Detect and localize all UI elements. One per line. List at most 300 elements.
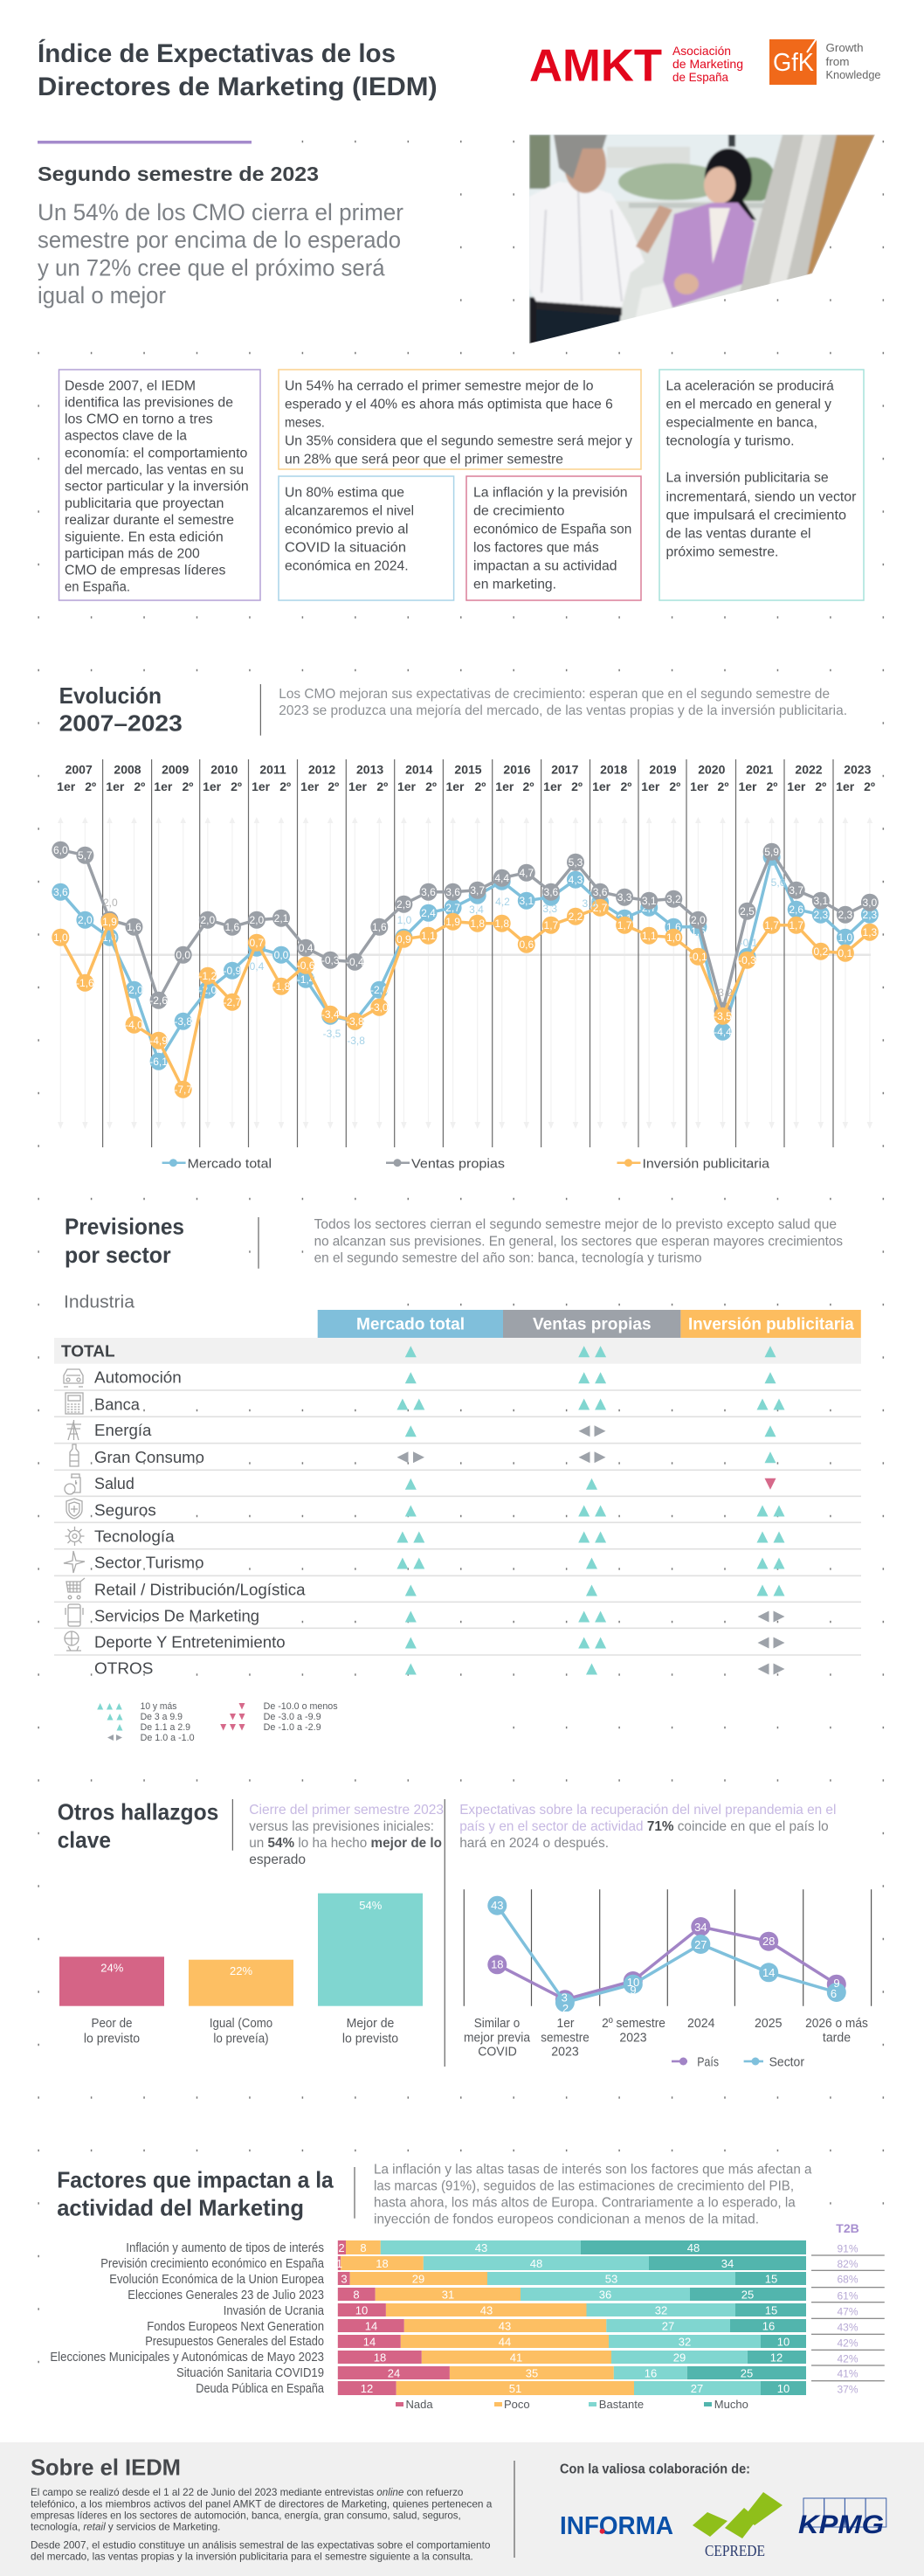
chart legend: factors: Mucho [714,2398,748,2411]
logo: CEPREDE [693,2492,783,2559]
series: Ventas propias: 1,6 [127,921,141,933]
year headers: 1er [641,779,660,793]
series: Inversión publicitaria: 1,1 [642,930,657,942]
panel: acceleration and ad investment: La aceleración se producirá [665,379,834,394]
text: first semester close: versus las previsiones iniciales: [249,1819,434,1834]
table legend: De -10.0 o menos [264,1701,338,1712]
panel: acceleration and ad investment: que impulsará el crecimiento [665,509,846,523]
series: Inversión publicitaria: 0,1 [838,947,853,959]
table column headers: Inversión publicitaria [688,1316,854,1334]
bar values: 2 [338,2241,345,2254]
panel: pre-COVID recovery [279,476,454,600]
series: Mercado total: 3,1 [519,895,534,907]
text: evolution summary: 2023 se produzca una mejoría del mercado, de las ventas propias y de la inversión publicitaria. [279,703,847,718]
series: Inversión publicitaria: 0,2 [813,945,828,958]
row: Seguros: Seguros [94,1502,156,1520]
series: Mercado total: -2,0 [125,984,143,996]
factor labels: Elecciones Generales 23 de Julio 2023 [128,2289,324,2302]
panel: intro about IEDM: participan más de 200 [65,547,200,562]
year headers: 2º [182,779,193,793]
table legend [97,1701,338,1743]
value labels: 9 [833,1977,840,1990]
bar values: 15 [765,2304,777,2317]
bar chart: first semester vs forecast: 54% [359,1899,383,1912]
panel: inflation factors [466,476,641,600]
text: factors summary: inyección de fondos europeos condicionan a menos de la mitad. [374,2212,759,2227]
headline statement: semestre por encima de lo esperado [38,227,401,253]
year headers: 1er [738,779,757,793]
bar chart: first semester vs forecast: Peor de [91,2016,133,2031]
off-marker value labels: -0,1 [740,937,758,949]
T2B column: 68% [837,2274,858,2286]
text: methodology: tecnología, retail y servicios de Marketing. [31,2522,220,2533]
year headers: 2º [376,779,388,793]
series: Ventas propias: 3,6 [544,886,559,898]
panel: acceleration and ad investment: incrementará, siendo un vector [665,490,856,505]
series: Ventas propias: 3,6 [421,886,436,898]
panel: first semester closing: un 28% que será peor que el primer semestre [285,453,563,467]
series: Ventas propias: 3,1 [813,895,828,907]
bars: Bastante [381,2240,761,2395]
photo: two professionals talking [524,131,882,350]
panel: pre-COVID recovery: económico previo al [285,523,409,537]
series: Inversión publicitaria: -0,6 [297,959,315,972]
row: Banca [66,1393,784,1414]
bar values: 36 [599,2289,611,2302]
text: first semester close: esperado [249,1852,306,1867]
off-marker value labels: 1,0 [397,914,412,926]
year headers: 2021 [746,763,773,777]
panel: inflation factors: económico de España son [473,523,631,537]
bar values: 32 [655,2304,667,2317]
logo: AMKT Asociación de Marketing de España [529,40,743,91]
year headers: 1er [495,779,514,793]
series: Ventas propias: -2,6 [149,994,168,1007]
chart legend: factors [396,2398,748,2411]
series: Mercado total: 2,3 [863,909,878,921]
logo: GfK Growth from Knowledge [769,38,880,85]
bar values: 43 [499,2320,511,2333]
row: Salud [65,1474,776,1494]
bar values: 27 [662,2320,674,2333]
series: Ventas propias: 4,4 [494,872,509,884]
bar values: 15 [765,2273,777,2286]
logo: GfK Growth from Knowledge: from [826,55,849,68]
table column headers [318,1310,861,1338]
row: Automoción: Automoción [94,1368,182,1386]
table column headers: Mercado total [356,1316,465,1334]
axis labels: Similar o [474,2016,520,2031]
text: factors summary [374,2163,812,2227]
value labels: 2 [562,2002,569,2015]
year headers: 2º [85,779,96,793]
text: pre-pandemic recovery expectations: Expectativas sobre la recuperación del nivel prepandemia en el [459,1803,836,1818]
bar chart: first semester vs forecast: Mejor de [347,2016,394,2031]
year headers: 2007 [66,763,93,777]
panel: pre-COVID recovery: alcanzaremos el nivel [285,504,414,519]
panel: intro about IEDM: sector particular y la inversión [65,480,249,495]
chart legend: factors: Poco [504,2398,530,2411]
row: Retail / Distribución/Logística: Retail / Distribución/Logística [94,1582,307,1599]
panel: intro about IEDM: Desde 2007, el IEDM [65,379,196,394]
bar values: 24 [388,2367,400,2380]
row: Servicios De Marketing: Servicios De Marketing [94,1608,259,1625]
series: Ventas propias: 3,1 [642,895,657,907]
T2B column [811,2221,885,2396]
series: Inversión publicitaria: 0,6 [519,938,534,951]
off-marker value labels: -3,8 [347,1035,365,1047]
series: Inversión publicitaria: 1,0 [666,931,681,944]
heading: Evolución 2007-2023: 2007–2023 [59,710,183,737]
series: Inversión publicitaria: 1,8 [494,918,509,930]
series: Mercado total: 4,3 [569,874,583,886]
axis labels: 2026 o más [805,2016,868,2031]
series: Ventas propias: 2,5 [740,905,755,918]
series: Inversión publicitaria: 1,9 [445,916,460,928]
year headers: 1er [154,779,173,793]
factor labels: Situación Sanitaria COVID19 [176,2366,324,2380]
series: Inversión publicitaria: 1,9 [102,916,117,928]
bar values: 14 [365,2320,377,2333]
year headers: 2011 [259,763,286,777]
year headers: 1er [348,779,368,793]
series: Inversión publicitaria: 1,3 [863,926,878,938]
series: Mercado total: 2,6 [789,904,803,916]
chart legend: País and Sector [672,2054,804,2069]
series: Ventas propias: -0,4 [346,956,364,968]
series: Ventas propias: 2,0 [250,914,265,926]
table legend: De -1.0 a -2.9 [264,1722,321,1733]
row: Energía: Energía [94,1422,152,1439]
bar values: 35 [526,2367,538,2380]
text: sector summary: en el segundo semestre del año son: banca, tecnología y turismo [314,1250,702,1265]
axis labels [464,2016,868,2060]
text: sector summary: no alcanzan sus previsiones. En general, los sectores que esperan mayores crecimientos [314,1234,843,1249]
table column headers: Ventas propias [533,1316,652,1334]
year headers: 1er [787,779,806,793]
series: Ventas propias: 0,0 [176,949,190,961]
year headers: 2014 [405,763,432,777]
table: sector forecasts [54,1293,861,1677]
value labels: 6 [831,1987,837,2000]
heading: Factores que impactan: actividad del Marketing [57,2195,304,2221]
text: factors summary: las marcas (91%), seguidos de las estimaciones de crecimiento del PIB, [374,2179,794,2194]
chart legend: evolution: Mercado total [188,1157,272,1172]
panel: inflation factors: impactan a su actividad [473,559,617,574]
text: evolution summary [279,687,847,718]
series: Inversión publicitaria: 1,7 [789,919,803,931]
value labels: 27 [694,1938,707,1951]
series: Inversión publicitaria: 2,7 [593,902,608,914]
headline statement: Un 54% de los CMO cierra el primer [38,199,403,225]
row: Automoción [64,1368,776,1387]
bar values: 10 [777,2336,790,2349]
panel: first semester closing: Un 54% ha cerrado el primer semestre mejor de lo [285,379,594,394]
panel: acceleration and ad investment: próximo semestre. [665,545,778,560]
row: Deporte Y Entretenimiento [65,1631,784,1652]
row: Salud: Salud [94,1475,134,1492]
table legend: De 3 a 9.9 [141,1712,183,1722]
series: Inversión publicitaria: -0,3 [738,954,756,966]
series: Mercado total: 2,4 [421,907,436,919]
series: Sector [487,1896,846,2012]
row: Energía [66,1420,776,1440]
series: Ventas propias: 2,0 [200,914,215,926]
series: Inversión publicitaria: 0,9 [396,933,411,945]
row: Tecnología [65,1527,784,1546]
factor labels: Presupuestos Generales del Estado [145,2335,324,2349]
footer panel [0,2442,924,2576]
year headers: 2º [134,779,145,793]
logo: GfK Growth from Knowledge: GfK [773,49,815,77]
axis labels: semestre [541,2030,590,2045]
panel: first semester closing: Un 35% considera que el segundo semestre será mejor y [285,434,632,449]
series: Mercado total: -6,1 [149,1056,168,1068]
bar values: 29 [673,2351,686,2365]
row: TOTAL [54,1338,861,1364]
row: Sector Turismo [64,1551,784,1573]
text: factors summary: hasta ahora, los más altos de Europa. Contrariamente a lo esperado, la [374,2196,796,2211]
value labels: 14 [762,1966,775,1979]
logo: KPMG: KPMG [798,2510,884,2539]
value labels: 9 [630,1984,637,1997]
series: Ventas propias: 1,6 [372,921,387,933]
bar values: 16 [645,2367,657,2380]
chart legend: evolution: Ventas propias [411,1157,505,1172]
bar values: 25 [741,2367,753,2380]
subtitle: Segundo semestre de 2023 [38,163,319,185]
text: methodology: telefónico, a los miembros activos del panel AMKT de directores de Marketing, quienes pertenecen a [31,2498,493,2510]
series: Ventas propias: 5,9 [764,846,779,858]
accent rule [38,141,252,143]
panel: intro about IEDM: realizar durante el semestre [65,513,234,528]
row: OTROS: OTROS [94,1659,153,1677]
year headers: 2º [231,779,242,793]
series: Mercado total: 3,6 [53,886,68,898]
T2B column: 37% [837,2384,858,2396]
series: Inversión publicitaria: -1,8 [272,980,291,993]
bars: Nada [338,2240,450,2395]
text: methodology [31,2487,493,2563]
heading: Factores que impactan: Factores que impactan a la [57,2166,334,2192]
series: Mercado total: 2,0 [78,914,93,926]
panel: pre-COVID recovery: Un 80% estima que [285,486,404,501]
table legend: 10 y más [141,1701,177,1712]
row: Tecnología: Tecnología [94,1528,176,1546]
series: Ventas propias: 3,7 [789,884,803,897]
series: Ventas propias: 0,4 [299,942,314,954]
heading: Previsiones por sector: Previsiones [65,1214,184,1240]
panel: intro about IEDM: del mercado, las ventas en su [65,463,244,478]
series: Ventas propias: 2,3 [838,909,853,921]
text: first semester close: Cierre del primer semestre 2023 [249,1803,444,1818]
year headers: 2º [766,779,777,793]
year headers: 2019 [649,763,677,777]
off-marker value labels: -3,5 [323,1028,341,1040]
series: Ventas propias: 3,0 [863,897,878,909]
year headers: 1er [592,779,611,793]
off-marker value labels: 3,3 [542,903,557,915]
series: Inversión publicitaria: -1,2 [198,970,217,982]
series: Inversión publicitaria: -7,7 [174,1084,192,1096]
panel: intro about IEDM: publicitaria que proyectan [65,496,224,511]
series: Mercado total: -2,0 [370,984,389,996]
series: Ventas propias: 3,6 [593,886,608,898]
series: Mercado total: -4,4 [714,1026,732,1038]
series: Inversión publicitaria: -4,9 [149,1035,168,1047]
text: first semester close: un 54% lo ha hecho mejor de lo [249,1836,442,1851]
chart legend: País and Sector: Sector [769,2054,804,2069]
bar chart: first semester vs forecast: 24% [100,1962,124,1975]
factor labels: Fondos Europeos Next Generation [147,2320,324,2334]
logo: AMKT Asociación de Marketing de España: Asociación [672,44,731,58]
line chart: recovery timing [464,1889,872,2069]
year headers: 2009 [162,763,189,777]
T2B column: 42% [837,2337,858,2350]
series: Mercado total: 2,7 [642,902,657,914]
chart legend: factors: Bastante [599,2398,644,2411]
series: Ventas propias: 2,9 [396,898,411,911]
text: pre-pandemic recovery expectations: país y en el sector de actividad 71% coincide en que el país lo [459,1819,829,1834]
bar values: 48 [530,2257,542,2270]
logo: GfK Growth from Knowledge: Growth [826,41,863,54]
series: Inversión publicitaria: 1,0 [53,931,68,944]
series: Inversión publicitaria: 1,1 [421,930,436,942]
series: País [487,1917,846,2009]
series: Inversión publicitaria: -3,5 [714,1010,732,1022]
year headers [57,763,875,793]
bars: Poco [341,2240,634,2395]
text: sector summary [314,1217,843,1265]
series: Mercado total: 2,1 [617,912,632,924]
headline statement [38,199,403,308]
bar values: 34 [721,2257,734,2270]
series: Mercado total: -2,0 [198,984,217,996]
bar chart: first semester vs forecast: lo previsto [342,2031,398,2046]
series: Mercado total: 2,7 [445,902,460,914]
text: methodology: Desde 2007, el estudio constituye un análisis semestral de las expectativas sobre el comportamiento [31,2540,491,2552]
row: Sector Turismo: Sector Turismo [94,1555,204,1572]
series: Ventas propias: -0,3 [321,954,340,966]
series: Ventas propias [52,841,879,1020]
row: Gran Consumo [70,1444,776,1466]
series: Ventas propias: 1,6 [225,921,240,933]
headline statement: igual o mejor [38,282,166,308]
T2B column: 41% [837,2368,858,2380]
row: Banca: Banca [94,1395,141,1413]
text: sector summary: Todos los sectores cierran el segundo semestre mejor de lo previsto excepto salud que [314,1217,837,1232]
off-marker value labels: 4,2 [495,896,510,908]
T2B column: 47% [837,2306,858,2318]
heading: Otros hallazgos clave: clave [58,1826,111,1852]
factor labels: Invasión de Ucrania [224,2304,325,2318]
axis labels: 1er [557,2016,575,2031]
bar values: 31 [442,2289,454,2302]
bar values: 18 [376,2257,389,2270]
factor labels: Deuda Pública en España [196,2382,325,2396]
panel: intro about IEDM [59,370,260,600]
heading: Evolución 2007-2023: Evolución [59,682,162,709]
year headers: 2º [425,779,437,793]
series: Ventas propias: 3,7 [470,884,485,897]
year headers: 2º [523,779,534,793]
panel: intro about IEDM: siguiente. En esta edición [65,530,224,545]
T2B column: T2B [836,2221,859,2235]
value labels: 28 [762,1935,775,1948]
value labels: 3 [562,1991,568,2005]
bar values: 8 [360,2241,367,2254]
year headers: 2023 [844,763,872,777]
panel: pre-COVID recovery: COVID la situación [285,541,406,556]
panel: acceleration and ad investment: especialmente en banca, [665,416,817,431]
year headers: 2º [571,779,583,793]
panel: first semester closing: meses. [285,416,325,431]
year headers: 2º [864,779,875,793]
series: Mercado total: 1,6 [666,921,681,933]
value labels: 10 [627,1976,639,1989]
bar chart: first semester vs forecast: Igual (Como [210,2016,272,2031]
series: Ventas propias: 4,7 [519,867,534,879]
year headers: 2020 [698,763,726,777]
panel: intro about IEDM: aspectos clave de la [65,429,187,444]
axis labels: 2º semestre [602,2016,665,2031]
logo: CEPREDE: CEPREDE [705,2542,765,2559]
series: Ventas propias: 6,0 [53,844,68,856]
series: Inversión publicitaria: 1,7 [617,919,632,931]
heading: Previsiones por sector [65,1214,184,1268]
year headers: 1er [836,779,855,793]
axis labels: mejor previa [464,2030,531,2045]
bar values: 32 [679,2336,691,2349]
off-marker value labels: 2,0 [103,897,118,909]
axis labels: COVID [478,2045,517,2060]
bar values: 3 [341,2273,348,2286]
bar values: 43 [480,2304,493,2317]
bar values: 10 [355,2304,368,2317]
chart legend: evolution [162,1157,770,1172]
series: Mercado total: 2,3 [813,909,828,921]
year headers: 1er [445,779,465,793]
factor labels: Elecciones Municipales y Autonómicas de Mayo 2023 [50,2351,324,2365]
row: Seguros [66,1499,784,1520]
year headers: 2º [669,779,680,793]
series: Inversión publicitaria: -3,0 [370,1001,389,1014]
text: pre-pandemic recovery expectations: hará en 2024 o después. [459,1836,609,1851]
table legend: De 1.1 a 2.9 [141,1722,190,1733]
factor labels: Inflación y aumento de tipos de interés [126,2241,324,2255]
bar values: 51 [509,2382,521,2395]
year headers: 2º [474,779,486,793]
heading: Evolución 2007-2023 [59,682,183,737]
series: Mercado total: -3,8 [174,1015,192,1028]
heading: Otros hallazgos clave: Otros hallazgos [58,1798,218,1825]
series: Mercado total: 0,0 [274,949,289,961]
panel: first semester closing [279,370,641,469]
panel: acceleration and ad investment [659,370,864,600]
row: OTROS [94,1659,784,1677]
bar values: 14 [363,2336,376,2349]
factor labels: Evolución Económica de la Union Europea [109,2273,325,2287]
series: Mercado total: 1,0 [102,931,117,944]
panel: intro about IEDM: economía: el comportamiento [65,447,247,461]
series: Inversión publicitaria: -1,6 [76,977,94,989]
year headers: 2015 [454,763,482,777]
series: Mercado total [52,848,879,1070]
year headers: 1er [106,779,125,793]
series: Mercado total: 1,6 [691,925,706,938]
table: sector forecasts: Industria [64,1293,135,1312]
series: Inversión publicitaria: 1,7 [544,919,559,931]
